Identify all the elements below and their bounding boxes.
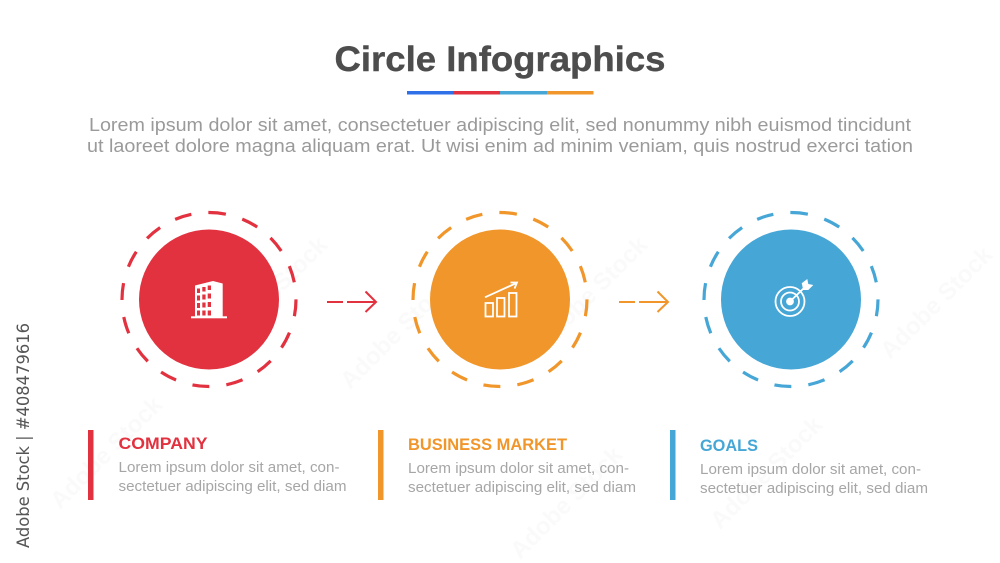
label: business market: sectetuer adipiscing elit, sed diam: [408, 480, 636, 496]
watermark: [45, 231, 998, 563]
label: goals: Lorem ipsum dolor sit amet, con-: [700, 462, 921, 478]
label: company: Lorem ipsum dolor sit amet, con-: [118, 460, 340, 476]
label: company: sectetuer adipiscing elit, sed diam: [118, 479, 346, 495]
title underline: [407, 91, 594, 94]
watermark: Adobe Stock: [210, 231, 333, 354]
arrow 2: [619, 292, 668, 312]
icon: building: [191, 281, 227, 318]
step 2: business market circle: [413, 212, 587, 386]
label: company: [88, 430, 346, 500]
label: business market: BUSINESS MARKET: [408, 435, 568, 454]
intro text: ut laoreet dolore magna aliquam erat. Ut wisi enim ad minim veniam, quis nostrud exerci tation: [87, 136, 913, 156]
watermark: Adobe Stock: [505, 441, 628, 563]
watermark: Adobe Stock: [335, 271, 458, 394]
title: Circle Infographics: [334, 40, 666, 79]
label: goals: sectetuer adipiscing elit, sed diam: [700, 481, 928, 497]
watermark: Adobe Stock: [45, 391, 168, 514]
label: goals: [670, 430, 928, 500]
step 1: company circle: [122, 212, 296, 386]
label: business market: [378, 430, 636, 500]
arrow 1: [327, 292, 376, 312]
stock credit: Adobe Stock | #408479616: [14, 323, 33, 548]
icon: growth chart: [485, 282, 517, 316]
icon: target: [776, 279, 813, 316]
intro text: Lorem ipsum dolor sit amet, consectetuer adipiscing elit, sed nonummy nibh euismod tincidunt: [89, 115, 911, 135]
label: company: COMPANY: [118, 434, 208, 453]
intro text: [87, 115, 913, 156]
label: business market: Lorem ipsum dolor sit amet, con-: [408, 461, 629, 477]
watermark: Adobe Stock: [705, 411, 828, 534]
watermark: Adobe Stock: [875, 241, 998, 364]
label: goals: GOALS: [700, 436, 758, 455]
watermark: Adobe Stock: [530, 231, 653, 354]
step 3: goals circle: [704, 212, 878, 386]
